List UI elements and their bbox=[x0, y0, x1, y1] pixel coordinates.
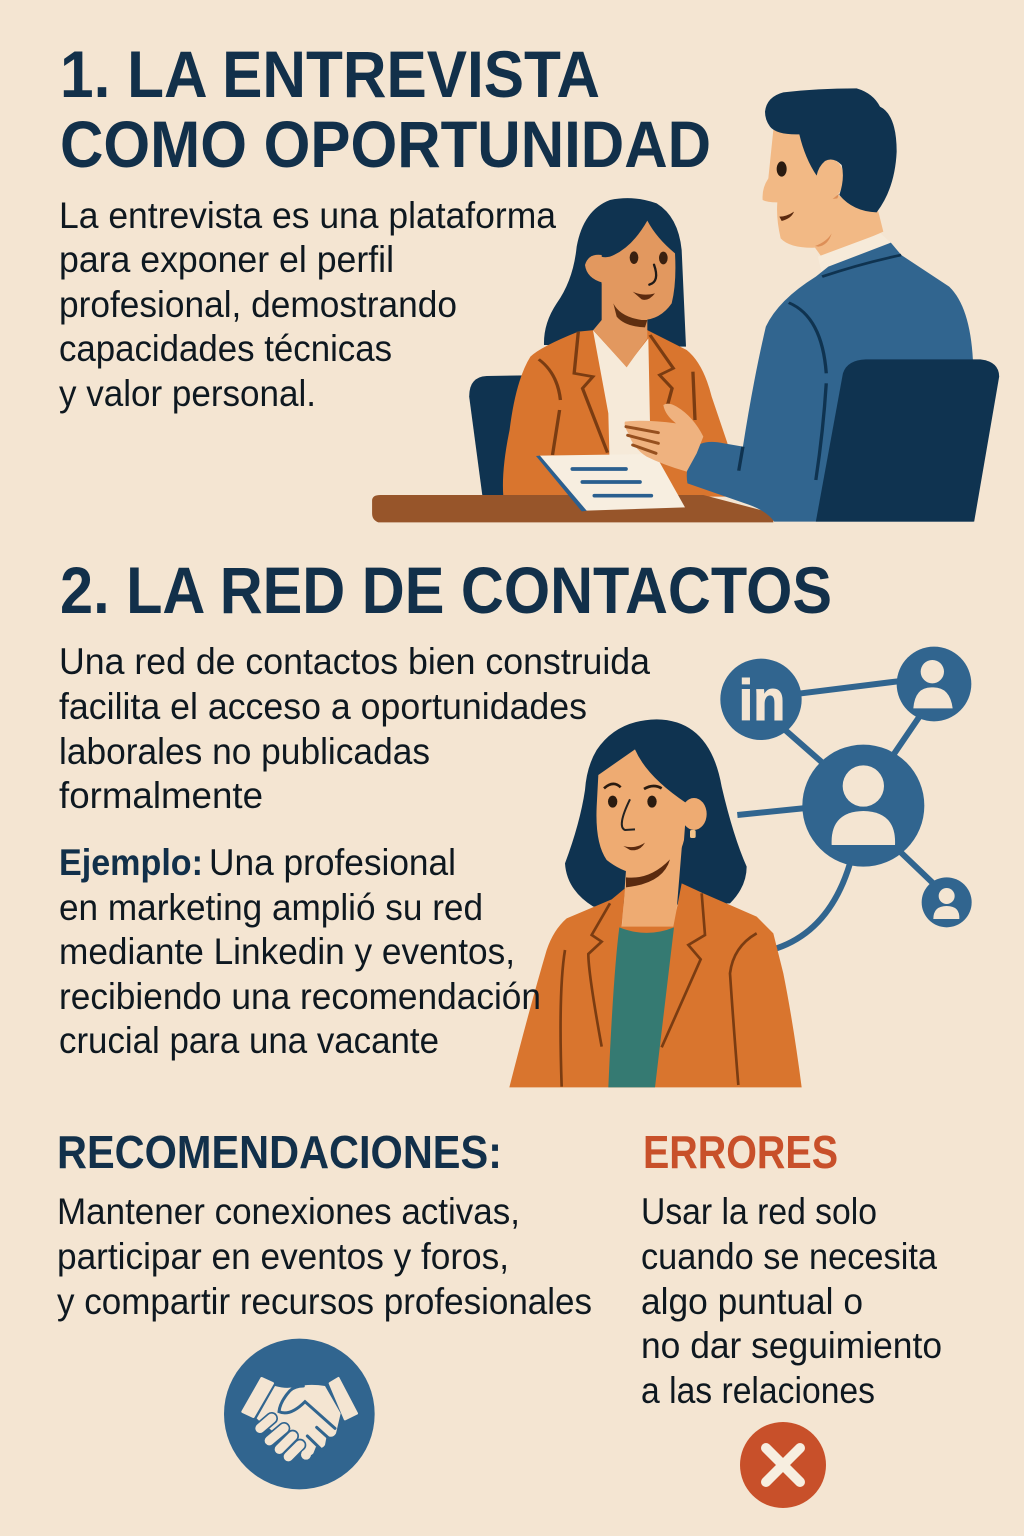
text block: recommendations: y compartir recursos profesionales bbox=[57, 1281, 592, 1322]
illustration: job interview scene bbox=[372, 88, 999, 522]
text block: example: en marketing amplió su red bbox=[59, 887, 483, 928]
text block: section 1 body: para exponer el perfil bbox=[59, 239, 394, 280]
professional woman bbox=[509, 719, 802, 1087]
text block: section 1 body: y valor personal. bbox=[59, 373, 316, 414]
illustration: contact network bbox=[509, 647, 972, 1087]
heading: section 1: COMO OPORTUNIDAD bbox=[60, 107, 711, 181]
text block: errors: cuando se necesita bbox=[641, 1236, 937, 1277]
interviewee woman bbox=[503, 198, 728, 497]
man's chair bbox=[816, 359, 999, 522]
interviewer man bbox=[625, 88, 973, 522]
text block: example: Ejemplo: bbox=[59, 842, 203, 883]
text block: section 1 body: capacidades técnicas bbox=[59, 328, 392, 369]
text block: section 2 body: formalmente bbox=[59, 775, 263, 816]
text block: example: Una profesional bbox=[209, 842, 456, 883]
desk bbox=[372, 495, 773, 522]
text block: example: recibiendo una recomendación bbox=[59, 976, 541, 1017]
network connectors bbox=[737, 681, 937, 948]
heading: errors: ERRORES bbox=[643, 1126, 838, 1178]
text block: section 1 body: profesional, demostrando bbox=[59, 284, 457, 325]
icon: error cross bbox=[740, 1422, 826, 1508]
text block: section 2 body: facilita el acceso a oportunidades bbox=[59, 686, 587, 727]
text block: section 1 body bbox=[59, 195, 556, 414]
text block: recommendations bbox=[57, 1191, 592, 1322]
text block: errors: a las relaciones bbox=[641, 1370, 875, 1411]
text block: recommendations: Mantener conexiones activas, bbox=[57, 1191, 520, 1232]
icon: contact node top right bbox=[897, 647, 971, 721]
text block: errors: no dar seguimiento bbox=[641, 1325, 942, 1366]
text block: section 2 body: laborales no publicadas bbox=[59, 731, 430, 772]
text block: recommendations: participar en eventos y foros, bbox=[57, 1236, 509, 1277]
text block: errors: algo puntual o bbox=[641, 1281, 863, 1322]
heading: section 1: 1. LA ENTREVISTA bbox=[60, 37, 600, 111]
icon: small contact node bbox=[922, 877, 972, 927]
heading: recommendations: RECOMENDACIONES: bbox=[57, 1126, 502, 1178]
text block: example: mediante Linkedin y eventos, bbox=[59, 931, 515, 972]
text block: errors bbox=[641, 1191, 942, 1411]
text block: section 2 body bbox=[59, 641, 650, 816]
text block: section 2 body: Una red de contactos bien construida bbox=[59, 641, 650, 682]
text block: example: crucial para una vacante bbox=[59, 1020, 439, 1061]
icon: handshake bbox=[224, 1339, 375, 1489]
icon: central contact node bbox=[802, 745, 924, 867]
woman's chair bbox=[469, 375, 526, 497]
document with text lines bbox=[536, 454, 685, 511]
icon: linkedin node bbox=[720, 659, 802, 740]
text block: errors: Usar la red solo bbox=[641, 1191, 877, 1232]
text block: example bbox=[59, 842, 541, 1061]
heading: section 1 bbox=[60, 37, 711, 181]
text block: section 1 body: La entrevista es una plataforma bbox=[59, 195, 556, 236]
heading: section 2: 2. LA RED DE CONTACTOS bbox=[60, 553, 832, 627]
icon: linkedin node: in bbox=[739, 669, 785, 733]
